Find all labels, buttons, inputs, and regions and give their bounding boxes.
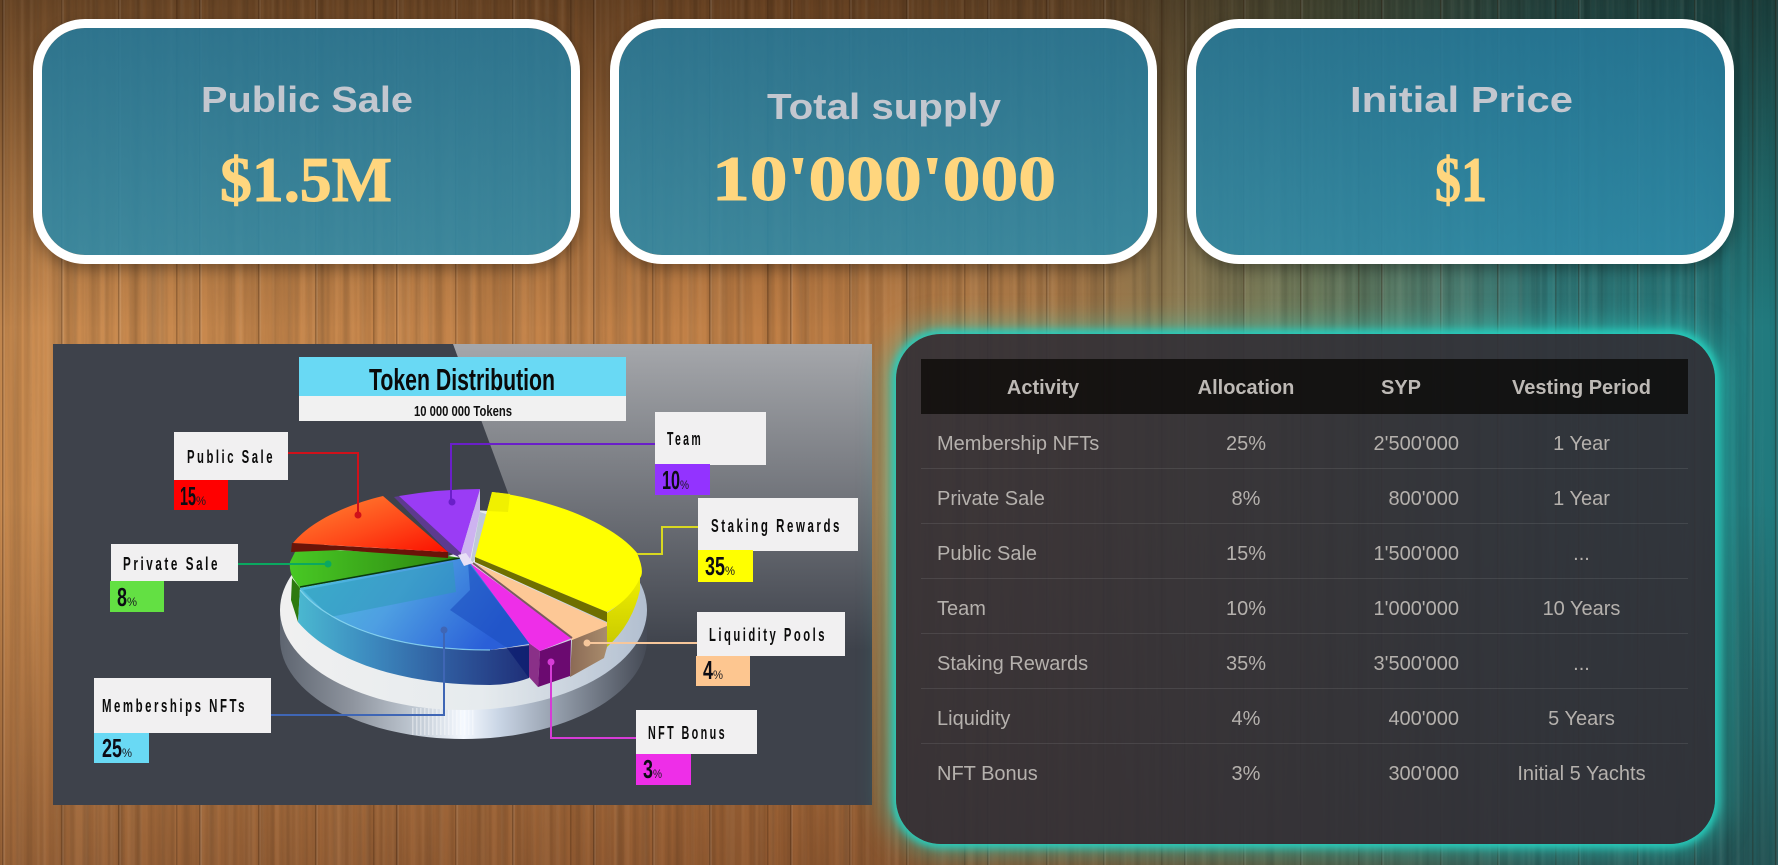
allocation table: Liquidity [937, 708, 1010, 730]
leader: staking rewards [637, 527, 698, 554]
leader: public sale [288, 453, 360, 518]
label: memberships NFTs 25%: Memberships NFTs [102, 696, 247, 716]
allocation table: 800'000 [1388, 488, 1459, 510]
allocation table: SYP [1381, 376, 1421, 398]
allocation table: 3'500'000 [1374, 652, 1459, 674]
stat card: initial price: $1 [1435, 145, 1487, 215]
allocation table: 400'000 [1388, 708, 1459, 730]
allocation table: 3% [1232, 762, 1260, 784]
label: NFT bonus 3%: NFT Bonus [648, 723, 727, 743]
3D pie chart [280, 489, 647, 739]
allocation table: 1'000'000 [1374, 598, 1459, 620]
allocation table: Membership NFTs [937, 432, 1099, 454]
label: team 10% [655, 412, 766, 495]
panel: token distribution chart [53, 344, 872, 805]
allocation table: 8% [1232, 488, 1260, 510]
label: public sale 15% [174, 432, 288, 511]
leader: team [450, 444, 655, 504]
leader: private sale [238, 562, 330, 566]
allocation table: 5 Years [1548, 708, 1615, 730]
stat card: public sale [33, 19, 580, 264]
allocation table: 1 Year [1553, 432, 1610, 454]
allocation table: Team [937, 598, 986, 620]
allocation table: Vesting Period [1512, 376, 1651, 398]
allocation table: Private Sale [937, 488, 1045, 510]
allocation table: ... [1573, 542, 1590, 564]
allocation table: 15% [1226, 542, 1266, 564]
label: staking rewards 35% [698, 498, 858, 582]
allocation table: 2'500'000 [1374, 432, 1459, 454]
label: team 10%: Team [667, 429, 703, 449]
label: staking rewards 35%: 35 [705, 551, 725, 581]
label: NFT bonus 3%: 3 [643, 754, 653, 784]
title block: 10 000 000 Tokens [414, 403, 512, 420]
label: private sale 8%: 8 [117, 582, 127, 612]
label: public sale 15%: 15 [180, 481, 196, 511]
leader: memberships NFTs [271, 628, 446, 715]
allocation table: 1'500'000 [1374, 542, 1459, 564]
label: memberships NFTs 25%: 25 [102, 733, 122, 763]
allocation table: Public Sale [937, 542, 1037, 564]
allocation table: 1 Year [1553, 488, 1610, 510]
allocation table: Staking Rewards [937, 652, 1088, 674]
allocation table: ... [1573, 652, 1590, 674]
title block: Token Distribution [369, 362, 555, 397]
stat card: public sale: $1.5M [220, 145, 392, 215]
label: team 10%: % [680, 478, 689, 492]
label: liquidity pools 4% [696, 612, 845, 686]
leader: liquidity pools [584, 640, 697, 646]
leader: NFT bonus [548, 660, 636, 738]
allocation table: NFT Bonus [937, 762, 1038, 784]
label: staking rewards 35%: % [725, 564, 735, 578]
stat card: initial price [1187, 19, 1734, 264]
allocation table: 300'000 [1388, 762, 1459, 784]
allocation table: Activity [1007, 376, 1079, 398]
allocation table: Allocation [1198, 376, 1294, 398]
panel: allocation table [896, 334, 1715, 844]
allocation table [921, 359, 1688, 784]
label: NFT bonus 3% [636, 710, 757, 785]
allocation table: 10% [1226, 598, 1266, 620]
label: private sale 8%: % [127, 595, 137, 609]
stat card: public sale: Public Sale [201, 79, 413, 120]
allocation table: 10 Years [1543, 598, 1620, 620]
label: NFT bonus 3%: % [653, 767, 662, 781]
label: memberships NFTs 25%: % [122, 746, 132, 760]
label: liquidity pools 4%: 4 [703, 655, 713, 685]
label: private sale 8% [110, 544, 238, 612]
label: public sale 15%: % [196, 494, 206, 508]
stat card: total supply: Total supply [767, 86, 1001, 127]
allocation table: 25% [1226, 432, 1266, 454]
allocation table: 4% [1232, 708, 1260, 730]
title block [299, 357, 626, 421]
stat card: total supply [610, 19, 1157, 264]
label: public sale 15%: Public Sale [187, 447, 275, 467]
allocation table: 35% [1226, 652, 1266, 674]
label: memberships NFTs 25% [94, 678, 271, 763]
stat card: total supply: 10'000'000 [712, 144, 1056, 214]
label: team 10%: 10 [662, 465, 680, 495]
stat card: initial price: Initial Price [1350, 79, 1573, 120]
label: private sale 8%: Private Sale [123, 554, 220, 574]
label: liquidity pools 4%: % [713, 668, 723, 682]
allocation table: Initial 5 Yachts [1517, 762, 1646, 784]
